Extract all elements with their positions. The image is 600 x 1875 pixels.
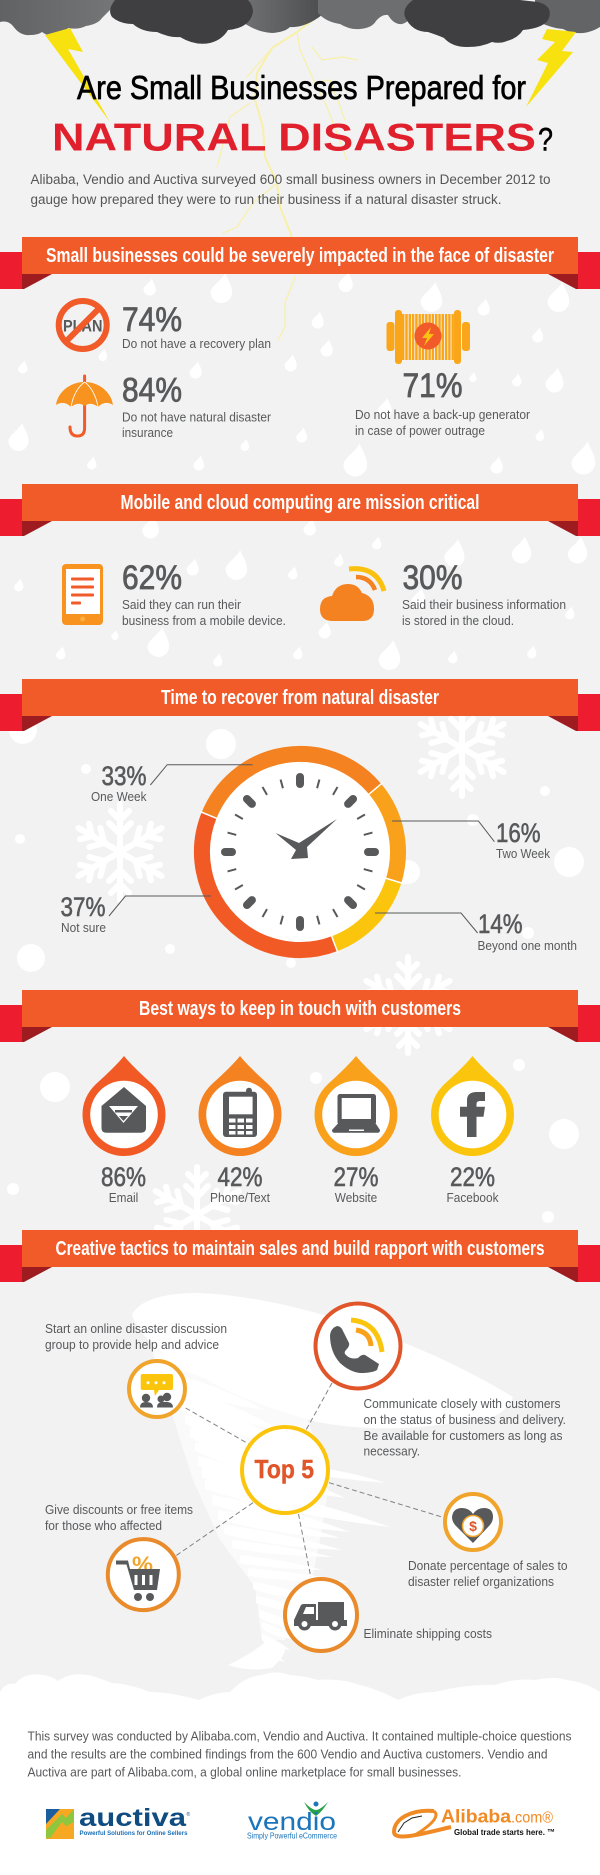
- label lines: [109, 765, 494, 933]
- label: two week: 16%: [496, 818, 540, 848]
- email: Email: [109, 1191, 138, 1205]
- website: 27%: [334, 1162, 378, 1192]
- section banner 2: [0, 484, 600, 536]
- email: 86%: [101, 1162, 146, 1192]
- panel: mobile and cloud: [62, 559, 566, 628]
- label: two week: Two Week: [496, 847, 551, 861]
- logo: auctiva: Powerful Solutions for Online Sellers: [80, 1830, 188, 1837]
- icon: cloud with signal: [320, 569, 384, 621]
- tactic: donate: [408, 1494, 568, 1589]
- section banner 4: [0, 990, 600, 1042]
- stat: recovery plan: 74%: [122, 301, 182, 339]
- stat: mobile: [122, 559, 286, 628]
- label: one week: [91, 761, 147, 804]
- clock hands: [276, 819, 337, 859]
- logo: auctiva: [46, 1804, 190, 1839]
- white footer cloud: [0, 1672, 600, 1875]
- title: NATURAL DISASTERS: [52, 116, 536, 160]
- clock face: [208, 760, 392, 944]
- section banner 3: Time to recover from natural disaster: [161, 687, 439, 709]
- icon: umbrella: [56, 376, 113, 436]
- tactic: communicate: on the status of business and delivery.: [364, 1413, 566, 1427]
- logo: vendio: [247, 1802, 337, 1840]
- tactic: discussion group: [45, 1322, 227, 1417]
- stat: cloud: Said their business information: [402, 598, 566, 612]
- label: beyond one month: 14%: [478, 909, 522, 939]
- stat: generator: [355, 367, 530, 438]
- tactic: donate: disaster relief organizations: [408, 1575, 554, 1589]
- title: ?: [538, 122, 553, 158]
- title: [52, 69, 553, 160]
- tactic: discussion group: Start an online disaster discussion: [45, 1322, 227, 1336]
- logo: alibaba: Alibaba: [441, 1806, 512, 1826]
- tactic: donate: $: [469, 1518, 477, 1534]
- storm clouds: [0, 0, 600, 47]
- tactic: communicate: necessary.: [364, 1444, 420, 1458]
- tactic: discussion group: group to provide help and advice: [45, 1338, 219, 1352]
- tactic: communicate: Communicate closely with customers: [364, 1397, 560, 1411]
- stat: generator: Do not have a back-up generator: [355, 408, 530, 422]
- tactic: discounts: for those who affected: [45, 1519, 162, 1533]
- panel: top 5 tactics: [45, 1304, 568, 1651]
- label: two week: [496, 818, 551, 861]
- website: [314, 1056, 398, 1205]
- dark clouds: [110, 0, 550, 47]
- section banner 3: [0, 679, 600, 731]
- phone/text: Phone/Text: [210, 1191, 271, 1205]
- icon: left lightning bolt: [45, 28, 110, 122]
- stat: insurance: 84%: [122, 372, 182, 410]
- section banner 4: Best ways to keep in touch with customers: [139, 998, 461, 1020]
- top 5 badge: [242, 1427, 328, 1513]
- logo: alibaba: .com®: [511, 1810, 553, 1826]
- label: one week: 33%: [102, 761, 146, 791]
- tactic: shipping: Eliminate shipping costs: [364, 1627, 492, 1641]
- stat: recovery plan: [122, 301, 271, 351]
- stat: mobile: 62%: [122, 559, 182, 597]
- stat: mobile: Said they can run their: [122, 598, 241, 612]
- logo: auctiva: auctiva: [79, 1804, 187, 1832]
- tactic: communicate: Be available for customers as long as: [364, 1429, 562, 1443]
- tactic: discounts: %: [132, 1552, 153, 1577]
- icon: generator: [386, 310, 470, 364]
- phone/text: [198, 1056, 282, 1205]
- icon: no plan: [59, 301, 107, 349]
- stat: cloud: 30%: [402, 559, 462, 597]
- icon: right lightning bolt: [526, 29, 576, 107]
- tactic: discounts: Give discounts or free items: [45, 1503, 193, 1517]
- logo: alibaba: Global trade starts here. ™: [454, 1827, 555, 1837]
- chart: recovery time clock: [60, 754, 577, 953]
- tactic: communicate: [316, 1304, 566, 1458]
- stat: insurance: Do not have natural disaster: [122, 410, 271, 424]
- pale lightning: [217, 20, 357, 340]
- section banner 5: [0, 1230, 600, 1282]
- footer text: [28, 1728, 572, 1780]
- intro text: Alibaba, Vendio and Auctiva surveyed 600 small business owners in December 2012 to: [30, 172, 550, 187]
- logo: auctiva: ®: [186, 1811, 190, 1818]
- stat: cloud: is stored in the cloud.: [402, 614, 514, 628]
- intro text: [30, 172, 550, 207]
- stat: insurance: insurance: [122, 426, 173, 440]
- stat: cloud: [402, 559, 566, 628]
- label: beyond one month: [478, 909, 577, 953]
- icon: tablet: [62, 564, 103, 625]
- connector lines: [176, 1383, 442, 1577]
- title: Are Small Businesses Prepared for: [77, 69, 526, 106]
- tactic: shipping: [285, 1579, 492, 1651]
- facebook: Facebook: [446, 1191, 499, 1205]
- label: not sure: 37%: [60, 892, 106, 922]
- tornado: [132, 1293, 513, 1669]
- intro text: gauge how prepared they were to run their business if a natural disaster struck.: [30, 192, 502, 207]
- stat: recovery plan: Do not have a recovery plan: [122, 337, 271, 351]
- phone/text: 42%: [218, 1162, 262, 1192]
- label: one week: One Week: [91, 790, 147, 804]
- label: not sure: Not sure: [61, 921, 106, 935]
- facebook: [431, 1056, 514, 1205]
- label: not sure: [60, 892, 106, 935]
- stat: mobile: business from a mobile device.: [122, 614, 286, 628]
- section banner 1: [0, 237, 600, 289]
- facebook: 22%: [450, 1162, 495, 1192]
- stat: insurance: [122, 372, 271, 440]
- footer text: Auctiva are part of Alibaba.com, a global online marketplace for small businesses.: [28, 1764, 462, 1780]
- snowflakes and snow dots: [7, 700, 584, 1263]
- website: Website: [335, 1191, 377, 1205]
- section banner 2: Mobile and cloud computing are mission critical: [120, 492, 480, 514]
- rain drops: [8, 272, 595, 670]
- label: beyond one month: Beyond one month: [478, 939, 577, 953]
- logo: vendio: Simply Powerful eCommerce: [247, 1832, 337, 1840]
- stat: generator: in case of power outrage: [355, 424, 485, 438]
- logo: vendio: vendio: [248, 1808, 336, 1836]
- panel: impact stats: [56, 301, 530, 440]
- icon: no plan: PLAN: [63, 318, 102, 336]
- tactic: discounts: [45, 1503, 193, 1610]
- tactic: donate: Donate percentage of sales to: [408, 1559, 568, 1573]
- grey clouds: [0, 0, 600, 36]
- ring segments: [200, 754, 403, 953]
- clock ticks: [221, 773, 379, 931]
- logo: alibaba: [394, 1806, 555, 1837]
- email: [82, 1056, 166, 1205]
- panel: keep in touch: [82, 1056, 514, 1205]
- stat: generator: 71%: [402, 367, 462, 405]
- footer text: and the results are the combined findings from the 600 Vendio and Auctiva customers. Vendio and: [28, 1746, 548, 1762]
- top 5 badge: Top 5: [254, 1454, 314, 1484]
